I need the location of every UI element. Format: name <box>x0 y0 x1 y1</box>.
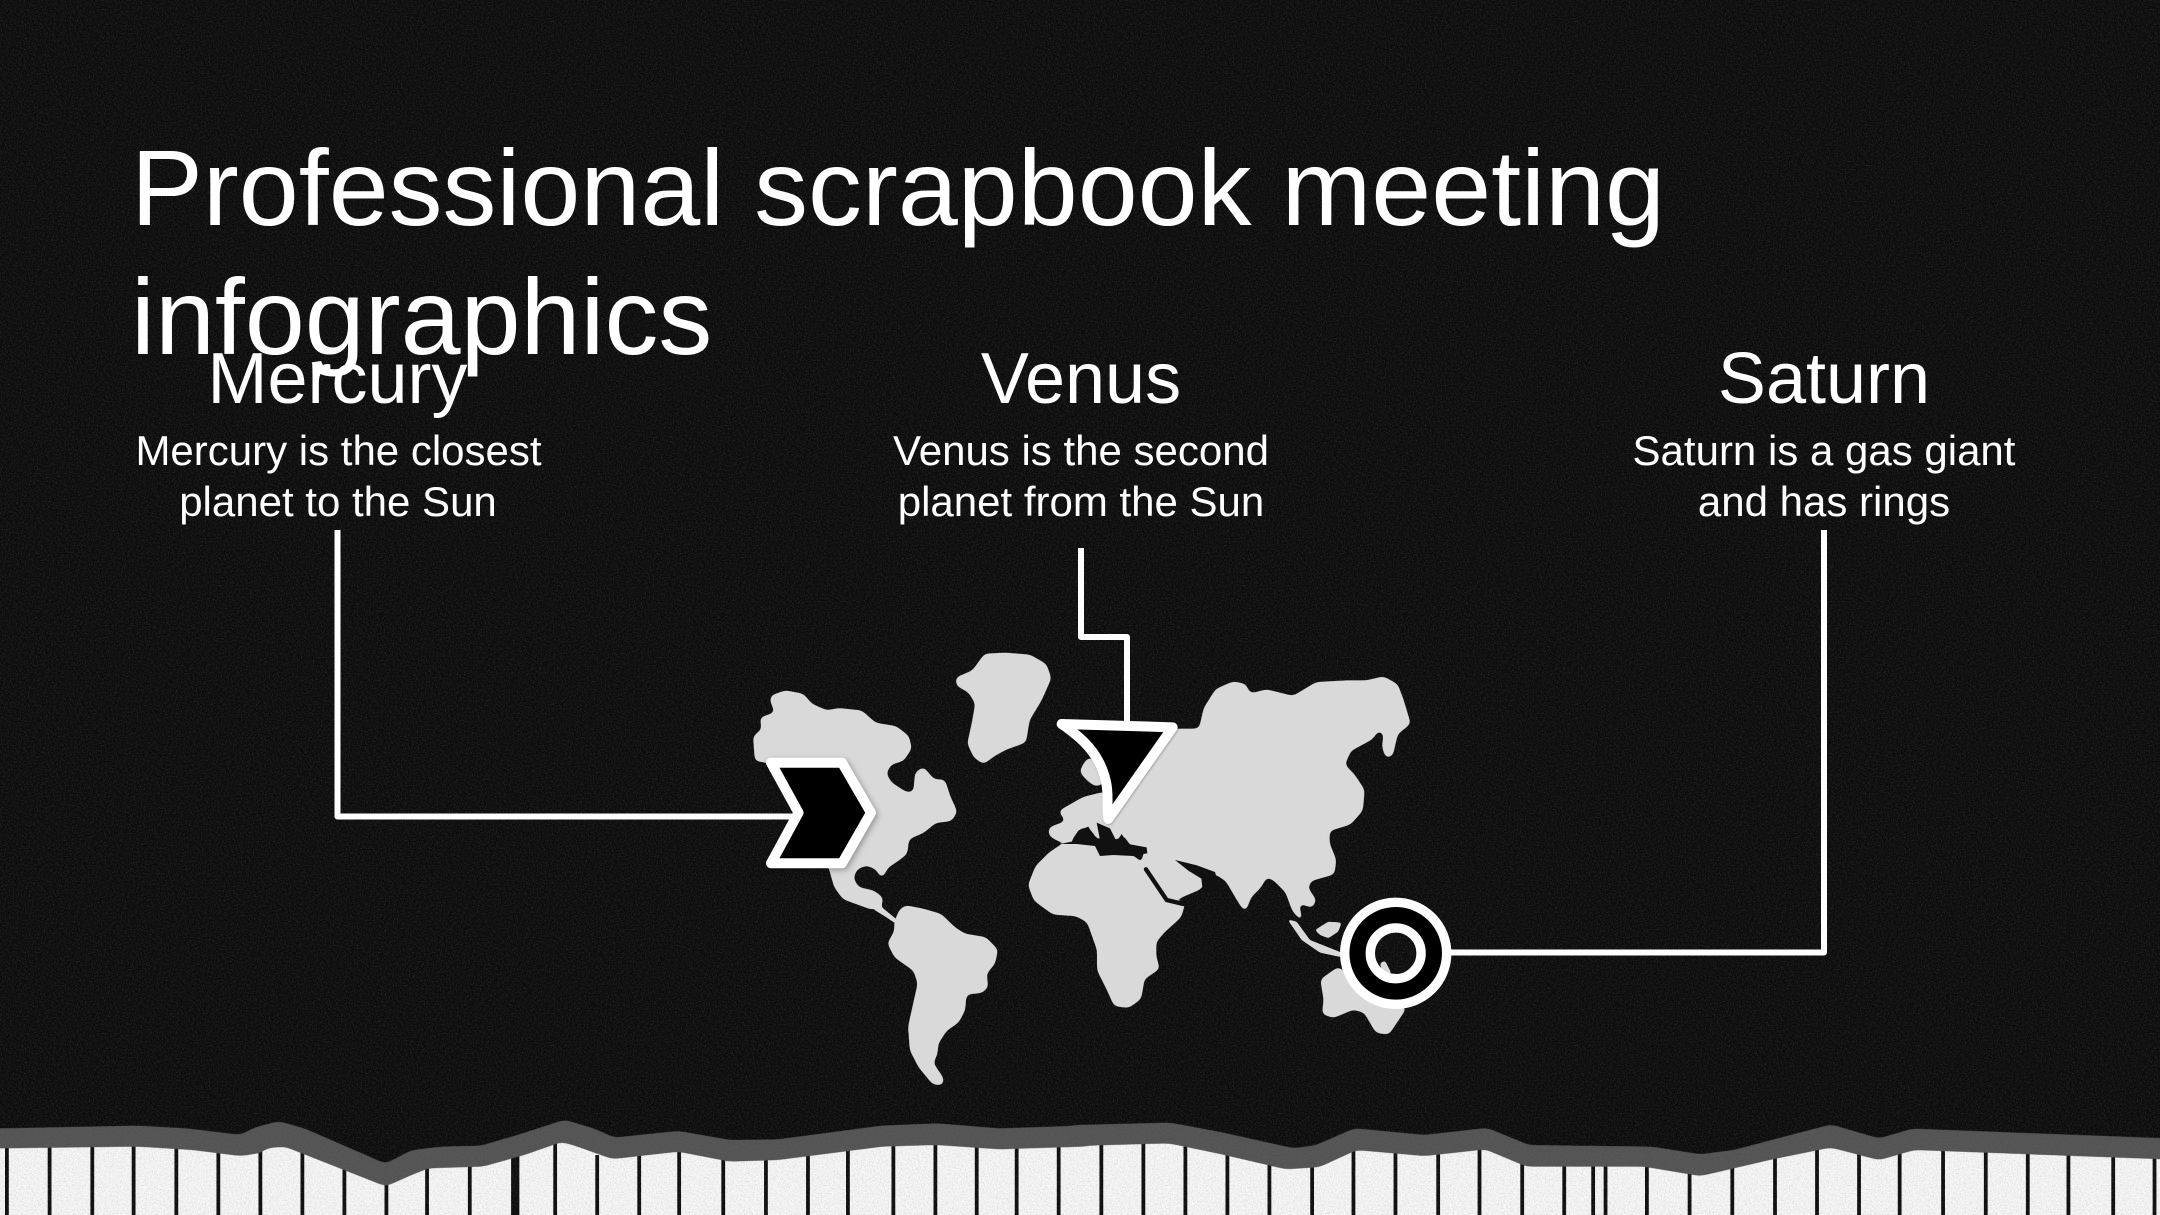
title: Professional scrapbook meeting <box>131 127 1665 248</box>
ruled lines <box>5 1144 1061 1215</box>
marker: chevron <box>771 763 871 863</box>
torn notebook paper strip <box>0 1122 2160 1215</box>
australia <box>1322 968 1405 1033</box>
sumatra and java <box>1287 919 1342 957</box>
text block: Saturn <box>1633 339 2016 525</box>
greenland <box>957 654 1050 763</box>
text block: Mercury: planet to the Sun <box>179 478 497 525</box>
ruled lines right <box>1099 1144 2156 1215</box>
text block: Venus: planet from the Sun <box>898 478 1264 525</box>
central america <box>873 898 897 924</box>
connector: Mercury <box>338 530 800 816</box>
text block: Mercury: Mercury <box>207 339 468 419</box>
text block: Venus: Venus <box>981 339 1181 419</box>
text block: Mercury: Mercury is the closest <box>135 427 542 474</box>
text block: Venus: Venus is the second <box>893 427 1269 474</box>
connector: Venus <box>1081 548 1127 730</box>
britain <box>1081 758 1103 785</box>
connector: Saturn <box>1450 530 1824 952</box>
text block: Mercury <box>135 339 542 525</box>
red sea, persian gulf and mediterranean <box>1060 823 1220 904</box>
title: infographics <box>131 256 712 377</box>
marker: target ring <box>1345 902 1447 1004</box>
south america <box>889 907 997 1084</box>
paper <box>0 1140 2160 1215</box>
text block: Venus <box>893 339 1269 525</box>
text block: Saturn: Saturn is a gas giant <box>1633 427 2016 474</box>
africa <box>1029 842 1184 1007</box>
eurasia <box>1050 678 1409 920</box>
text block: Saturn: Saturn <box>1718 339 1930 419</box>
borneo <box>1315 922 1342 938</box>
land masses <box>754 654 1409 1084</box>
text block: Saturn: and has rings <box>1698 478 1950 525</box>
north america <box>754 692 956 908</box>
torn paper edge band <box>0 1122 2160 1184</box>
world map <box>754 654 1409 1084</box>
title <box>131 127 1665 377</box>
papua <box>1380 961 1391 976</box>
thin land details <box>873 898 1391 976</box>
marker: curved triangle <box>1062 724 1173 819</box>
